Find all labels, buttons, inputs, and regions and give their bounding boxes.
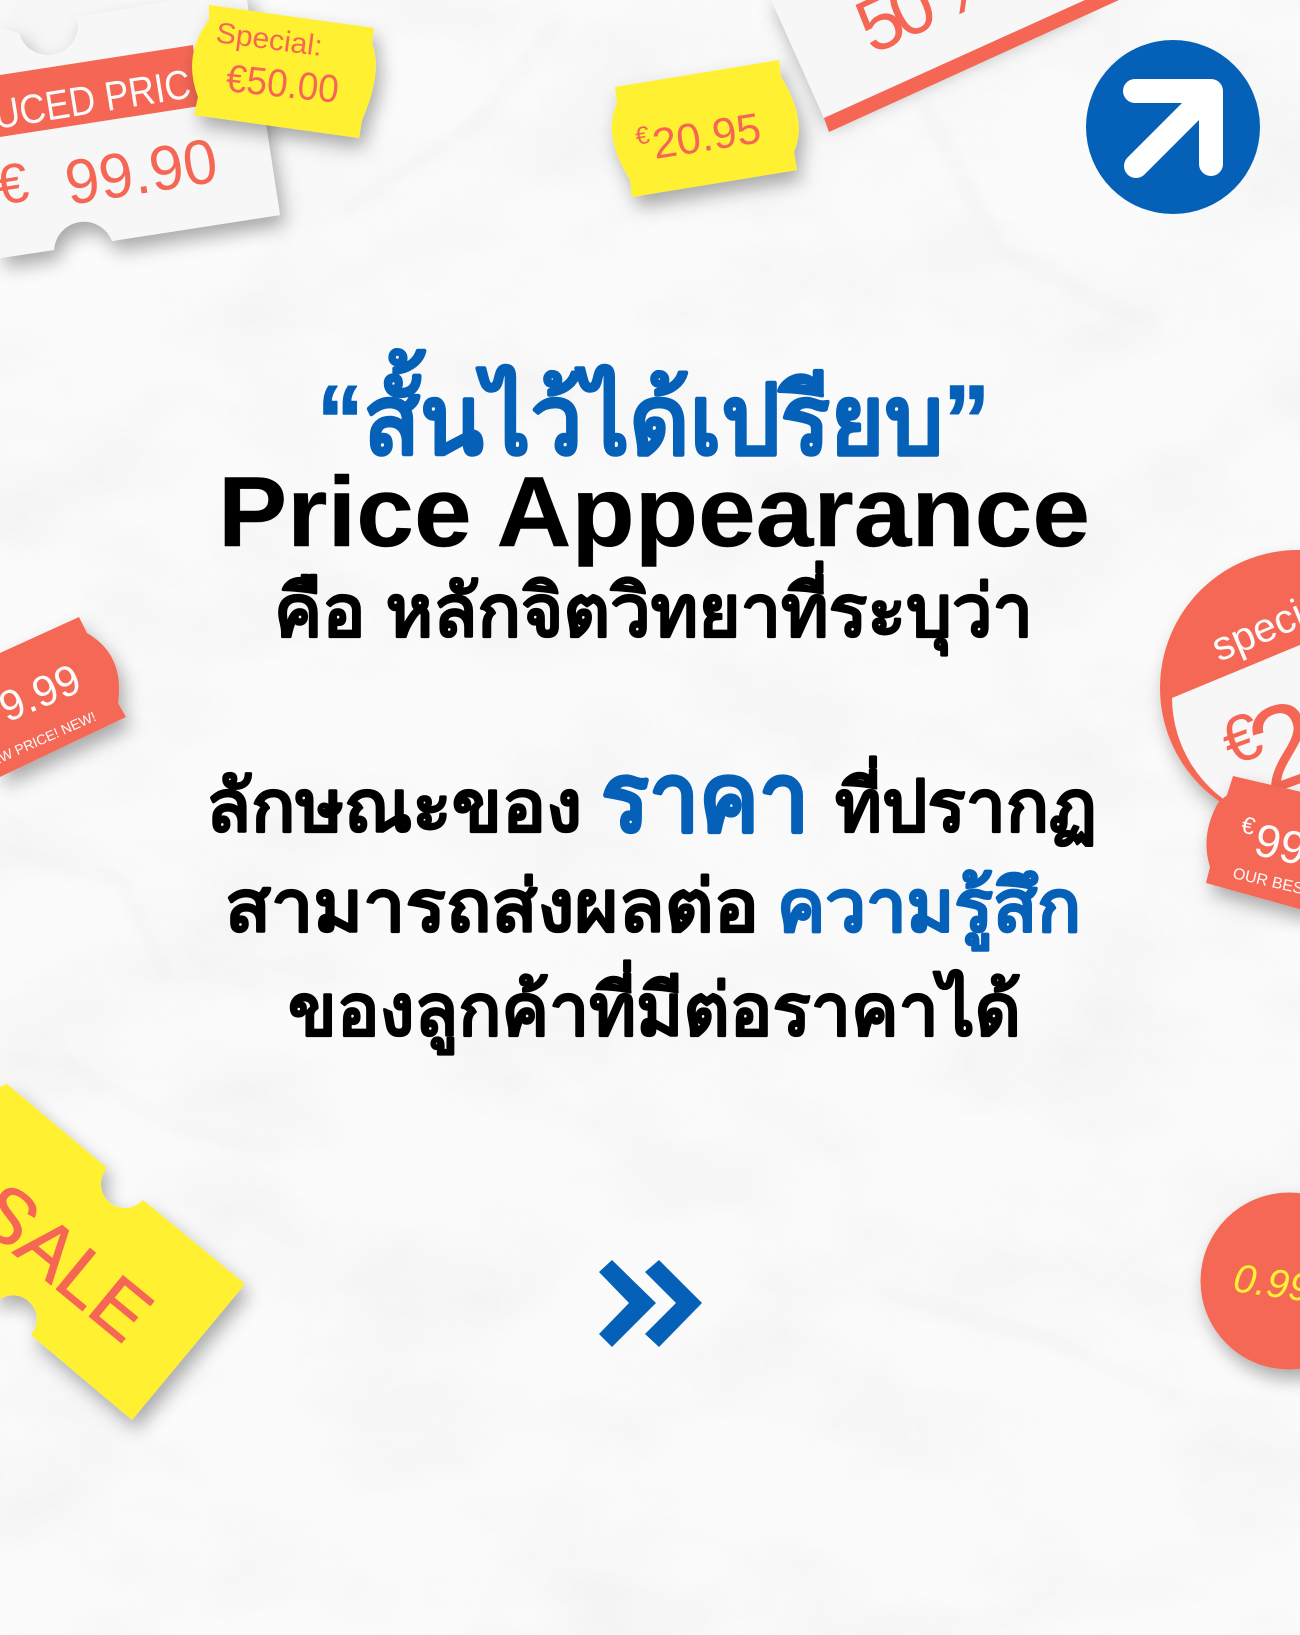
price tag: special 50.00 (yellow) [192,5,376,138]
arrow: double chevron [599,1260,702,1347]
icon: blue circle with arrow [1086,40,1260,214]
text block: definition: ที่ปรากฏ [835,755,1097,847]
price tag: 20.95 (yellow) [612,60,799,197]
price tag: special round sticker (red circle) [1160,550,1300,826]
heading: thai title in quotes: “สั้นไว้ได้เปรียบ” [317,348,990,475]
price tag: reduced price (white) [0,0,280,258]
heading: price appearance: Price Appearance [218,456,1090,567]
tag text: euro: € [1211,697,1271,779]
text block: definition: ของลูกค้าที่มีต่อราคาได้ [288,959,1021,1056]
price tag: 0.99 (red circle) [1200,1192,1300,1370]
text block: definition: ลักษณะของ [206,767,582,847]
tag text: 99.90: 99.90 [60,126,222,219]
text block: definition: ราคา [601,745,809,852]
tag text: euro sign: € [1239,812,1258,841]
tag text: 50.00: €50.00 [224,57,341,112]
subheading: thai definition intro: คือ หลักจิตวิทยาที่ระบุว่า [274,560,1033,657]
price tag: new price 9.99 (red) [0,617,126,777]
text block: definition: ความรู้สึก [777,867,1081,952]
text block: definition [206,745,1097,1056]
price tag: sale (yellow) [0,1084,245,1420]
price tag: 50 percent (white with red stripe) [769,0,1119,132]
tag text: 20.95: 20.95 [649,104,764,169]
tag text: euro sign: € [633,121,652,151]
price tag: our best price 99 (red) [1206,776,1300,912]
text block: definition: สามารถส่งผลต่อ [225,867,759,947]
tag text: special: Special: [214,17,324,63]
